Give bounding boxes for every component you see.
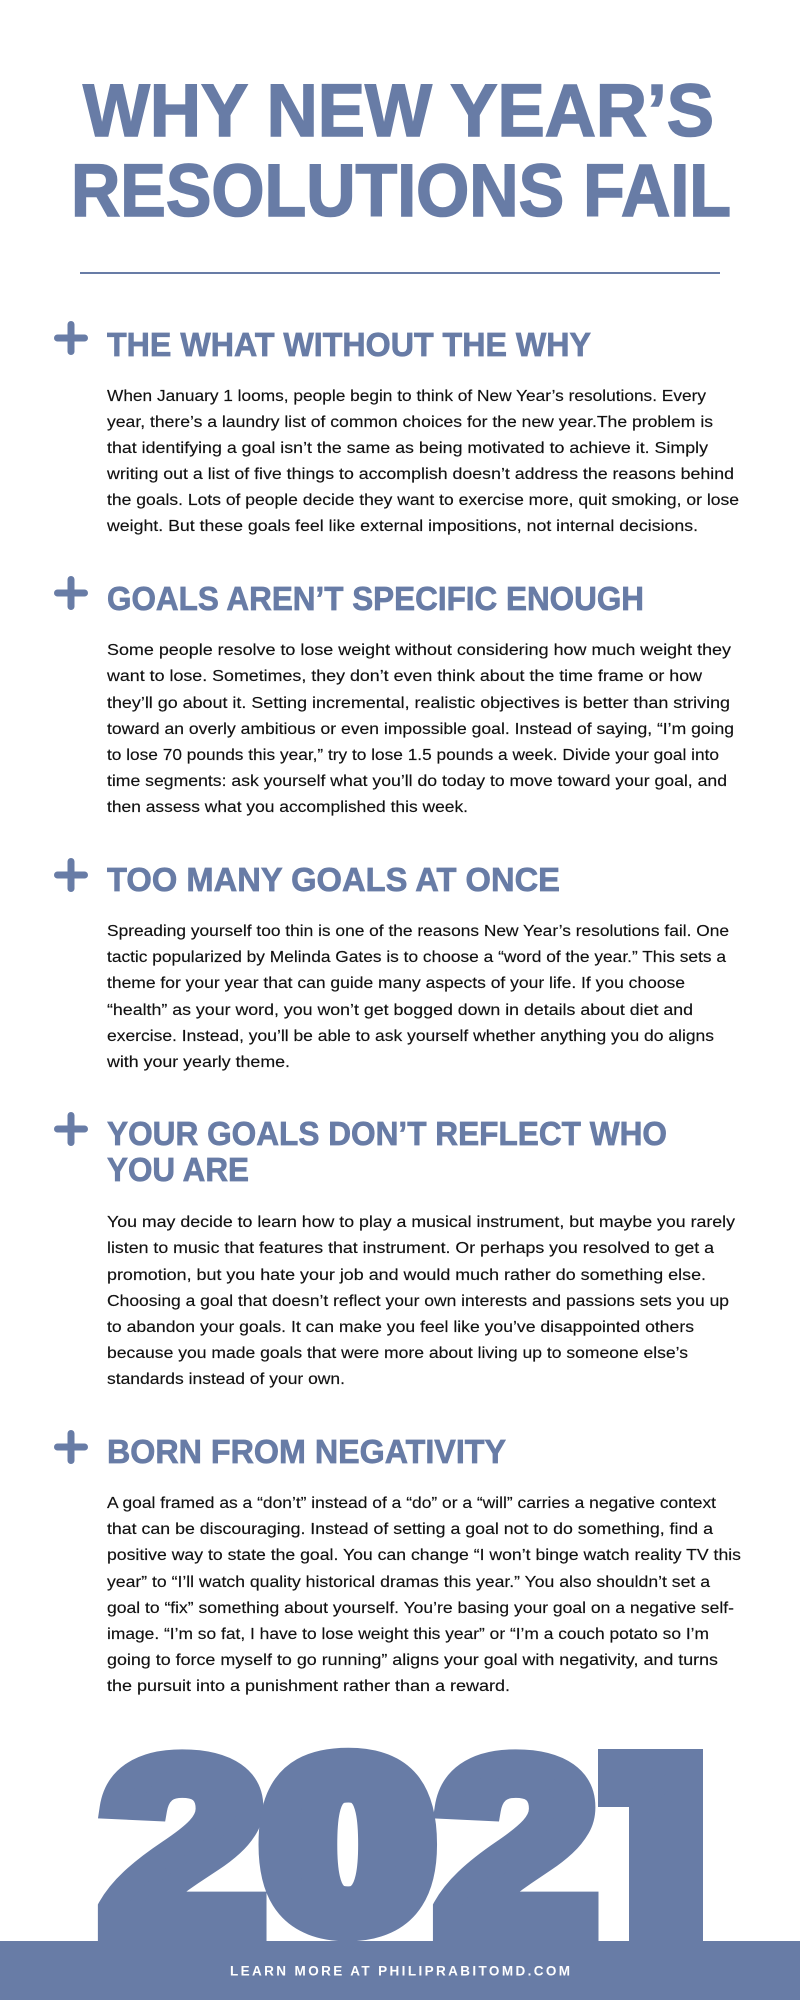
- heading: YOU ARE: [107, 1151, 249, 1188]
- footer band: [0, 1941, 800, 2000]
- heading: YOUR GOALS DON’T REFLECT WHO: [107, 1115, 667, 1152]
- text block: [106, 388, 739, 535]
- text block: When January 1 looms, people begin to think of New Year’s resolutions. Every: [107, 388, 706, 405]
- text block: to lose 70 pounds this year,” try to lose 1.5 pounds a week. Divide your goal into: [107, 747, 719, 764]
- text block: want to lose. Sometimes, they don’t even think about the time frame or how: [106, 668, 702, 685]
- icon: plus: [54, 576, 88, 610]
- text block: then assess what you accomplished this week.: [107, 799, 468, 816]
- title: [71, 69, 731, 232]
- text block: promotion, but you hate your job and would much rather do something else.: [107, 1267, 706, 1284]
- text block: because you made goals that were more about living up to someone else’s: [107, 1345, 688, 1362]
- text block: image. “I’m so fat, I have to lose weight this year” or “I’m a couch potato so I’m: [107, 1626, 709, 1643]
- text block: positive way to state the goal. You can change “I won’t binge watch reality TV this: [107, 1547, 741, 1564]
- text block: tactic popularized by Melinda Gates is to choose a “word of the year.” This sets a: [107, 949, 726, 966]
- icon: plus: [54, 1112, 88, 1146]
- text block: goal to “fix” something about yourself. You’re basing your goal on a negative self-: [107, 1600, 734, 1617]
- text block: [107, 1214, 735, 1388]
- text block: listen to music that features that instrument. Or perhaps you resolved to get a: [107, 1240, 714, 1257]
- heading: THE WHAT WITHOUT THE WHY: [107, 326, 591, 363]
- text block: theme for your year that can guide many aspects of your life. If you choose: [107, 975, 685, 992]
- text block: going to force myself to go running” aligns your goal with negativity, and turns: [107, 1652, 718, 1669]
- icon: plus: [54, 1430, 88, 1464]
- text block: [106, 923, 729, 1071]
- text block: weight. But these goals feel like external impositions, not internal decisions.: [106, 518, 698, 535]
- text block: standards instead of your own.: [107, 1371, 345, 1388]
- panel: goals aren't specific enough: [54, 576, 734, 816]
- panel: your goals don't reflect who you are: [54, 1112, 735, 1388]
- big year 2021: 0: [266, 1715, 430, 1973]
- text block: “health” as your word, you won’t get bogged down in details about diet and: [107, 1002, 693, 1019]
- big year 2021: 2: [101, 1711, 265, 1982]
- icon: plus: [54, 321, 88, 355]
- heading: TOO MANY GOALS AT ONCE: [107, 861, 560, 898]
- panel: too many goals at once: [54, 858, 729, 1071]
- text block: year” to “I’ll watch quality historical dramas this year.” You also shouldn’t set a: [107, 1574, 710, 1591]
- text block: with your yearly theme.: [106, 1054, 290, 1071]
- big year 2021: [101, 1711, 727, 2000]
- text block: the pursuit into a punishment rather than a reward.: [107, 1678, 510, 1695]
- text block: [106, 642, 734, 816]
- text block: toward an overly ambitious or even impossible goal. Instead of saying, “I’m going: [107, 721, 734, 738]
- text block: they’ll go about it. Setting incremental, realistic objectives is better than striving: [107, 695, 730, 712]
- panel: born from negativity: [54, 1430, 741, 1695]
- text block: Some people resolve to lose weight without considering how much weight they: [107, 642, 731, 659]
- text block: A goal framed as a “don’t” instead of a “do” or a “will” carries a negative context: [107, 1495, 717, 1512]
- text block: [107, 1495, 741, 1695]
- text block: the goals. Lots of people decide they want to exercise more, quit smoking, or lose: [107, 492, 739, 509]
- title: RESOLUTIONS FAIL: [71, 149, 731, 232]
- title: WHY NEW YEAR’S: [83, 69, 714, 152]
- text block: exercise. Instead, you’ll be able to ask yourself whether anything you do aligns: [107, 1028, 714, 1045]
- text block: that identifying a goal isn’t the same as being motivated to achieve it. Simply: [107, 440, 708, 457]
- icon: plus: [54, 858, 88, 892]
- panel: the what without the why: [54, 321, 739, 535]
- text block: to abandon your goals. It can make you feel like you’ve disappointed others: [107, 1319, 694, 1336]
- text block: that can be discouraging. Instead of setting a goal not to do something, find a: [107, 1521, 713, 1538]
- big year 2021: 2: [436, 1711, 597, 1982]
- footer text: LEARN MORE AT PHILIPRABITOMD.COM: [230, 1964, 570, 1978]
- text block: You may decide to learn how to play a musical instrument, but maybe you rarely: [107, 1214, 735, 1231]
- text block: Spreading yourself too thin is one of the reasons New Year’s resolutions fail. One: [107, 923, 729, 940]
- text block: writing out a list of five things to accomplish doesn’t address the reasons behind: [106, 466, 734, 483]
- text block: Choosing a goal that doesn’t reflect your own interests and passions sets you up: [107, 1293, 729, 1310]
- heading: BORN FROM NEGATIVITY: [107, 1433, 506, 1470]
- text block: time segments: ask yourself what you’ll do today to move toward your goal, and: [107, 773, 727, 790]
- heading: GOALS AREN’T SPECIFIC ENOUGH: [107, 580, 644, 617]
- heading: [107, 1115, 667, 1188]
- text block: year, there’s a laundry list of common choices for the new year.The problem is: [107, 414, 713, 431]
